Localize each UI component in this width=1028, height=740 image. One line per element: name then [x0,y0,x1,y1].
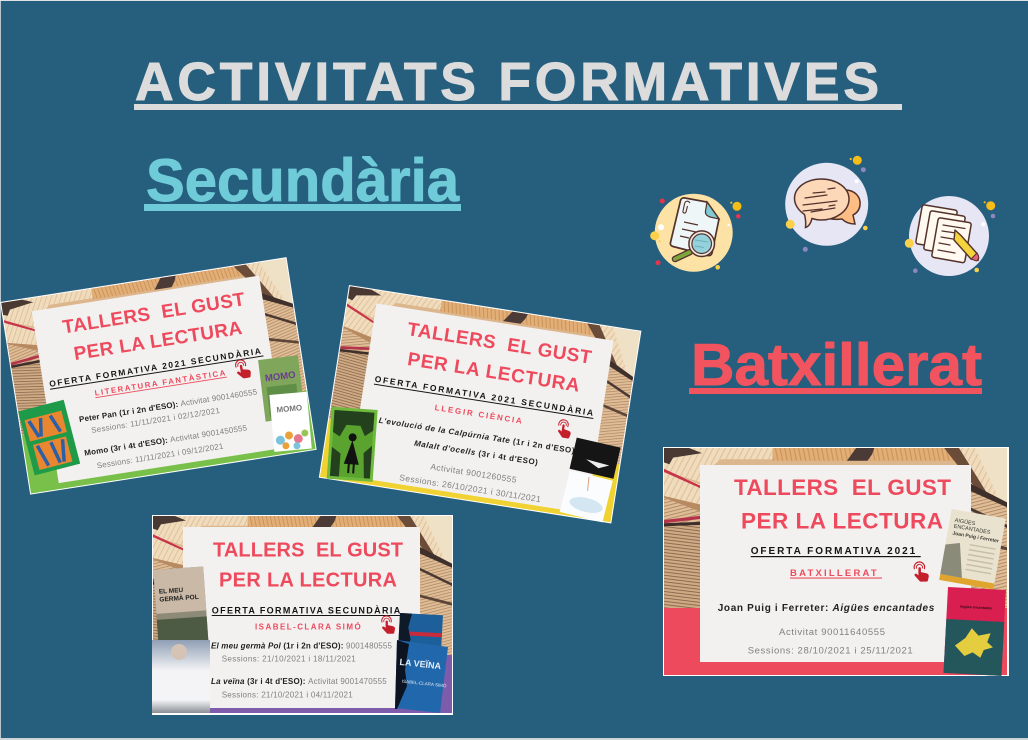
book cover: Peter Pan [18,400,80,475]
icon: papers with pencil [905,196,995,276]
book cover: blue [397,613,443,675]
book cover: El pont de la lectura [152,640,210,713]
text: offer line: OFERTA FORMATIVA 2021 SECUNDÀRIA [374,374,594,418]
panel: card Batxillerat [663,447,1009,676]
icon: chat bubbles [785,156,868,252]
book cover: red Aigües encantades: Aigües encantades [960,605,992,610]
text: book titles: Malalt d'ocells (3r i 4t d'ESO) [414,439,539,467]
icon: hand pointer [557,419,573,439]
heading: card title [401,319,593,398]
text: topic: LLEGIR CIÈNCIA [434,403,523,426]
book cover: Momo green [258,355,305,422]
panel: card Isabel-Clara Simó [152,515,453,715]
book cover: Aigües encantades [939,509,1006,589]
text: sessions: Peter Pan (1r i 2n d'ESO): Activitat 9001460555 [78,387,258,424]
icon: hand pointer [235,359,252,379]
text: topic: BATXILLERAT [790,568,877,579]
text: sessions: Sessions: 21/10/2021 i 18/11/2021 [222,655,356,664]
heading: card title: TALLERS EL GUST [61,289,247,338]
heading: card title: PER LA LECTURA [219,570,397,592]
text: offer line: OFERTA FORMATIVA 2021 SECUNDÀRIA [48,346,261,389]
book cover: La veïna [395,640,448,713]
text: topic: ISABEL-CLARA SIMÓ [255,622,361,631]
icon: hand pointer [914,562,929,582]
text: sessions [748,627,913,656]
text: sessions: Activitat 90011640555 [779,627,885,638]
panel: card Literatura fantàstica [0,257,317,495]
book cover: El meu germà Pol [153,567,208,645]
heading: card title: TALLERS EL GUST [406,319,593,369]
icon: hand pointer [382,616,395,634]
book cover: Malalt d'ocells white [560,470,613,522]
panel: card Llegir ciència [319,285,641,524]
book cover: Calpúrnia Tate [327,407,378,482]
text: sessions [78,387,266,472]
heading: card title [213,540,403,592]
text: sessions: Sessions: 21/10/2021 i 04/11/2021 [222,691,353,700]
book cover: Momo white: MOMO [276,403,303,414]
text: sessions: Activitat 9001260555 [430,461,518,485]
heading: card title: PER LA LECTURA [741,508,943,533]
text: book titles [375,416,575,472]
book cover: Momo white [269,392,312,452]
text: offer line: OFERTA FORMATIVA 2021 [751,546,916,557]
book cover: El meu germà Pol: EL MEU [159,587,184,596]
text: sessions: La veïna (3r i 4t d'ESO): Activitat 9001470555 [211,677,387,686]
heading: card title: TALLERS EL GUST [213,540,403,562]
text: sessions: Sessions: 11/11/2021 i 09/12/2021 [96,442,225,470]
text: topic: LITERATURA FANTÀSTICA [94,368,226,398]
text: author and work: Joan Puig i Ferreter: Aigües encantades [718,603,935,614]
text: book titles: L'evolució de la Calpúrnia Tate (1r i 2n d'ESO) [378,416,575,455]
heading: Secundària: Secundària [146,147,460,214]
heading: card title: PER LA LECTURA [406,349,581,397]
heading: Batxillerat: Batxillerat [691,332,982,398]
book cover: Aigües encantades: ENCANTADES [953,524,991,536]
text: sessions [399,457,544,504]
book cover: red Aigües encantades [943,587,1006,676]
title: ACTIVITATS FORMATIVES [135,53,879,112]
text: sessions [211,641,393,700]
book cover: Aigües encantades: Joan Puig i Ferreter [952,531,999,545]
text: sessions: Sessions: 28/10/2021 i 25/11/2021 [748,645,913,656]
icon: document with magnifying glass [650,194,742,272]
text: sessions: Sessions: 26/10/2021 i 30/11/2021 [399,472,542,504]
book cover: Aigües encantades: AIGÜES [954,517,976,527]
heading: card title [734,475,951,533]
book cover: La veïna: ISABEL-CLARA SIMÓ [402,678,447,688]
heading: card title: TALLERS EL GUST [734,475,951,500]
text: sessions: El meu germà Pol (1r i 2n d'ESO): 9001480555 [211,641,393,650]
heading: card title: PER LA LECTURA [72,318,244,365]
heading: card title [61,289,251,366]
text: sessions: Momo (3r i 4t d'ESO): Activitat 9001450555 [84,423,248,458]
book cover: El meu germà Pol: GERMÀ POL [159,592,199,604]
book cover: La veïna: LA VEÏNA [399,657,442,671]
book cover: Malalt d'ocells black [570,438,621,479]
text: offer line: OFERTA FORMATIVA SECUNDÀRIA [212,605,401,615]
book cover: Momo green: MOMO [264,370,296,384]
text: sessions: Sessions: 11/11/2021 i 02/12/2021 [91,406,221,435]
